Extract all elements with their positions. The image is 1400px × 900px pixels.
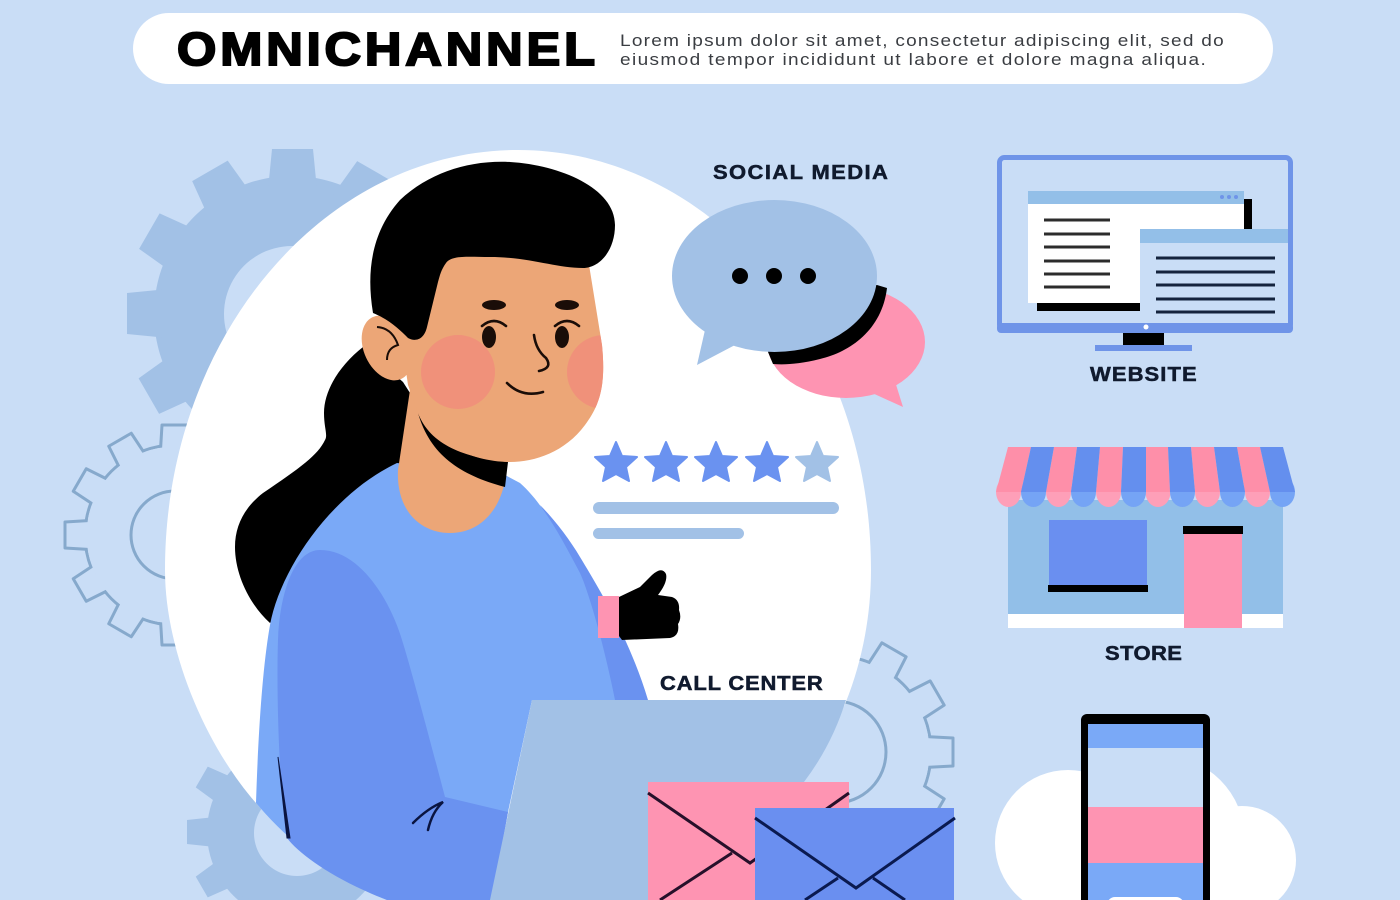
ponytail	[235, 347, 410, 623]
label: store: STORE	[1105, 643, 1182, 665]
elbow mark	[413, 802, 443, 830]
description text: eiusmod tempor incididunt ut labore et dolore magna aliqua.	[620, 50, 1206, 69]
sweater body	[256, 463, 615, 900]
label: social media: SOCIAL MEDIA	[713, 162, 888, 184]
neck	[398, 390, 510, 533]
title: OMNICHANNEL	[177, 24, 595, 75]
icon: website monitor	[997, 158, 1293, 351]
label: call center: CALL CENTER	[660, 673, 823, 695]
envelope: blue	[755, 808, 955, 900]
ear detail	[377, 327, 398, 360]
description text: Lorem ipsum dolor sit amet, consectetur adipiscing elit, sed do	[620, 31, 1224, 50]
icon: phone	[1081, 714, 1210, 900]
icon: rating stars	[595, 442, 838, 481]
brows	[482, 300, 579, 348]
ear	[352, 307, 422, 389]
gear: outline right	[739, 634, 953, 862]
gear: large solid	[127, 149, 447, 469]
chin shadow	[418, 413, 508, 487]
icon: store	[996, 447, 1295, 628]
description text	[620, 31, 1224, 69]
eyelids, nose and mouth	[482, 321, 579, 394]
label: website: WEBSITE	[1090, 364, 1197, 386]
envelope: pink	[648, 782, 849, 900]
white egg backdrop	[165, 150, 871, 900]
sweater back strip	[540, 505, 648, 700]
hand: thumbs up	[598, 570, 680, 640]
review text bars	[593, 502, 839, 539]
cheeks	[421, 335, 604, 409]
icon: cloud	[995, 755, 1296, 900]
sweater arm	[277, 550, 508, 900]
person	[235, 162, 648, 900]
gear: outline left	[65, 425, 285, 645]
laptop	[490, 700, 846, 900]
hair top	[370, 162, 615, 340]
arm crease	[278, 757, 290, 838]
eyes	[482, 326, 496, 348]
header pill	[133, 13, 1273, 84]
face	[400, 240, 603, 462]
gear: small solid bottom left	[187, 722, 387, 900]
icon: chat bubbles	[672, 200, 925, 407]
store awning	[996, 447, 1295, 507]
